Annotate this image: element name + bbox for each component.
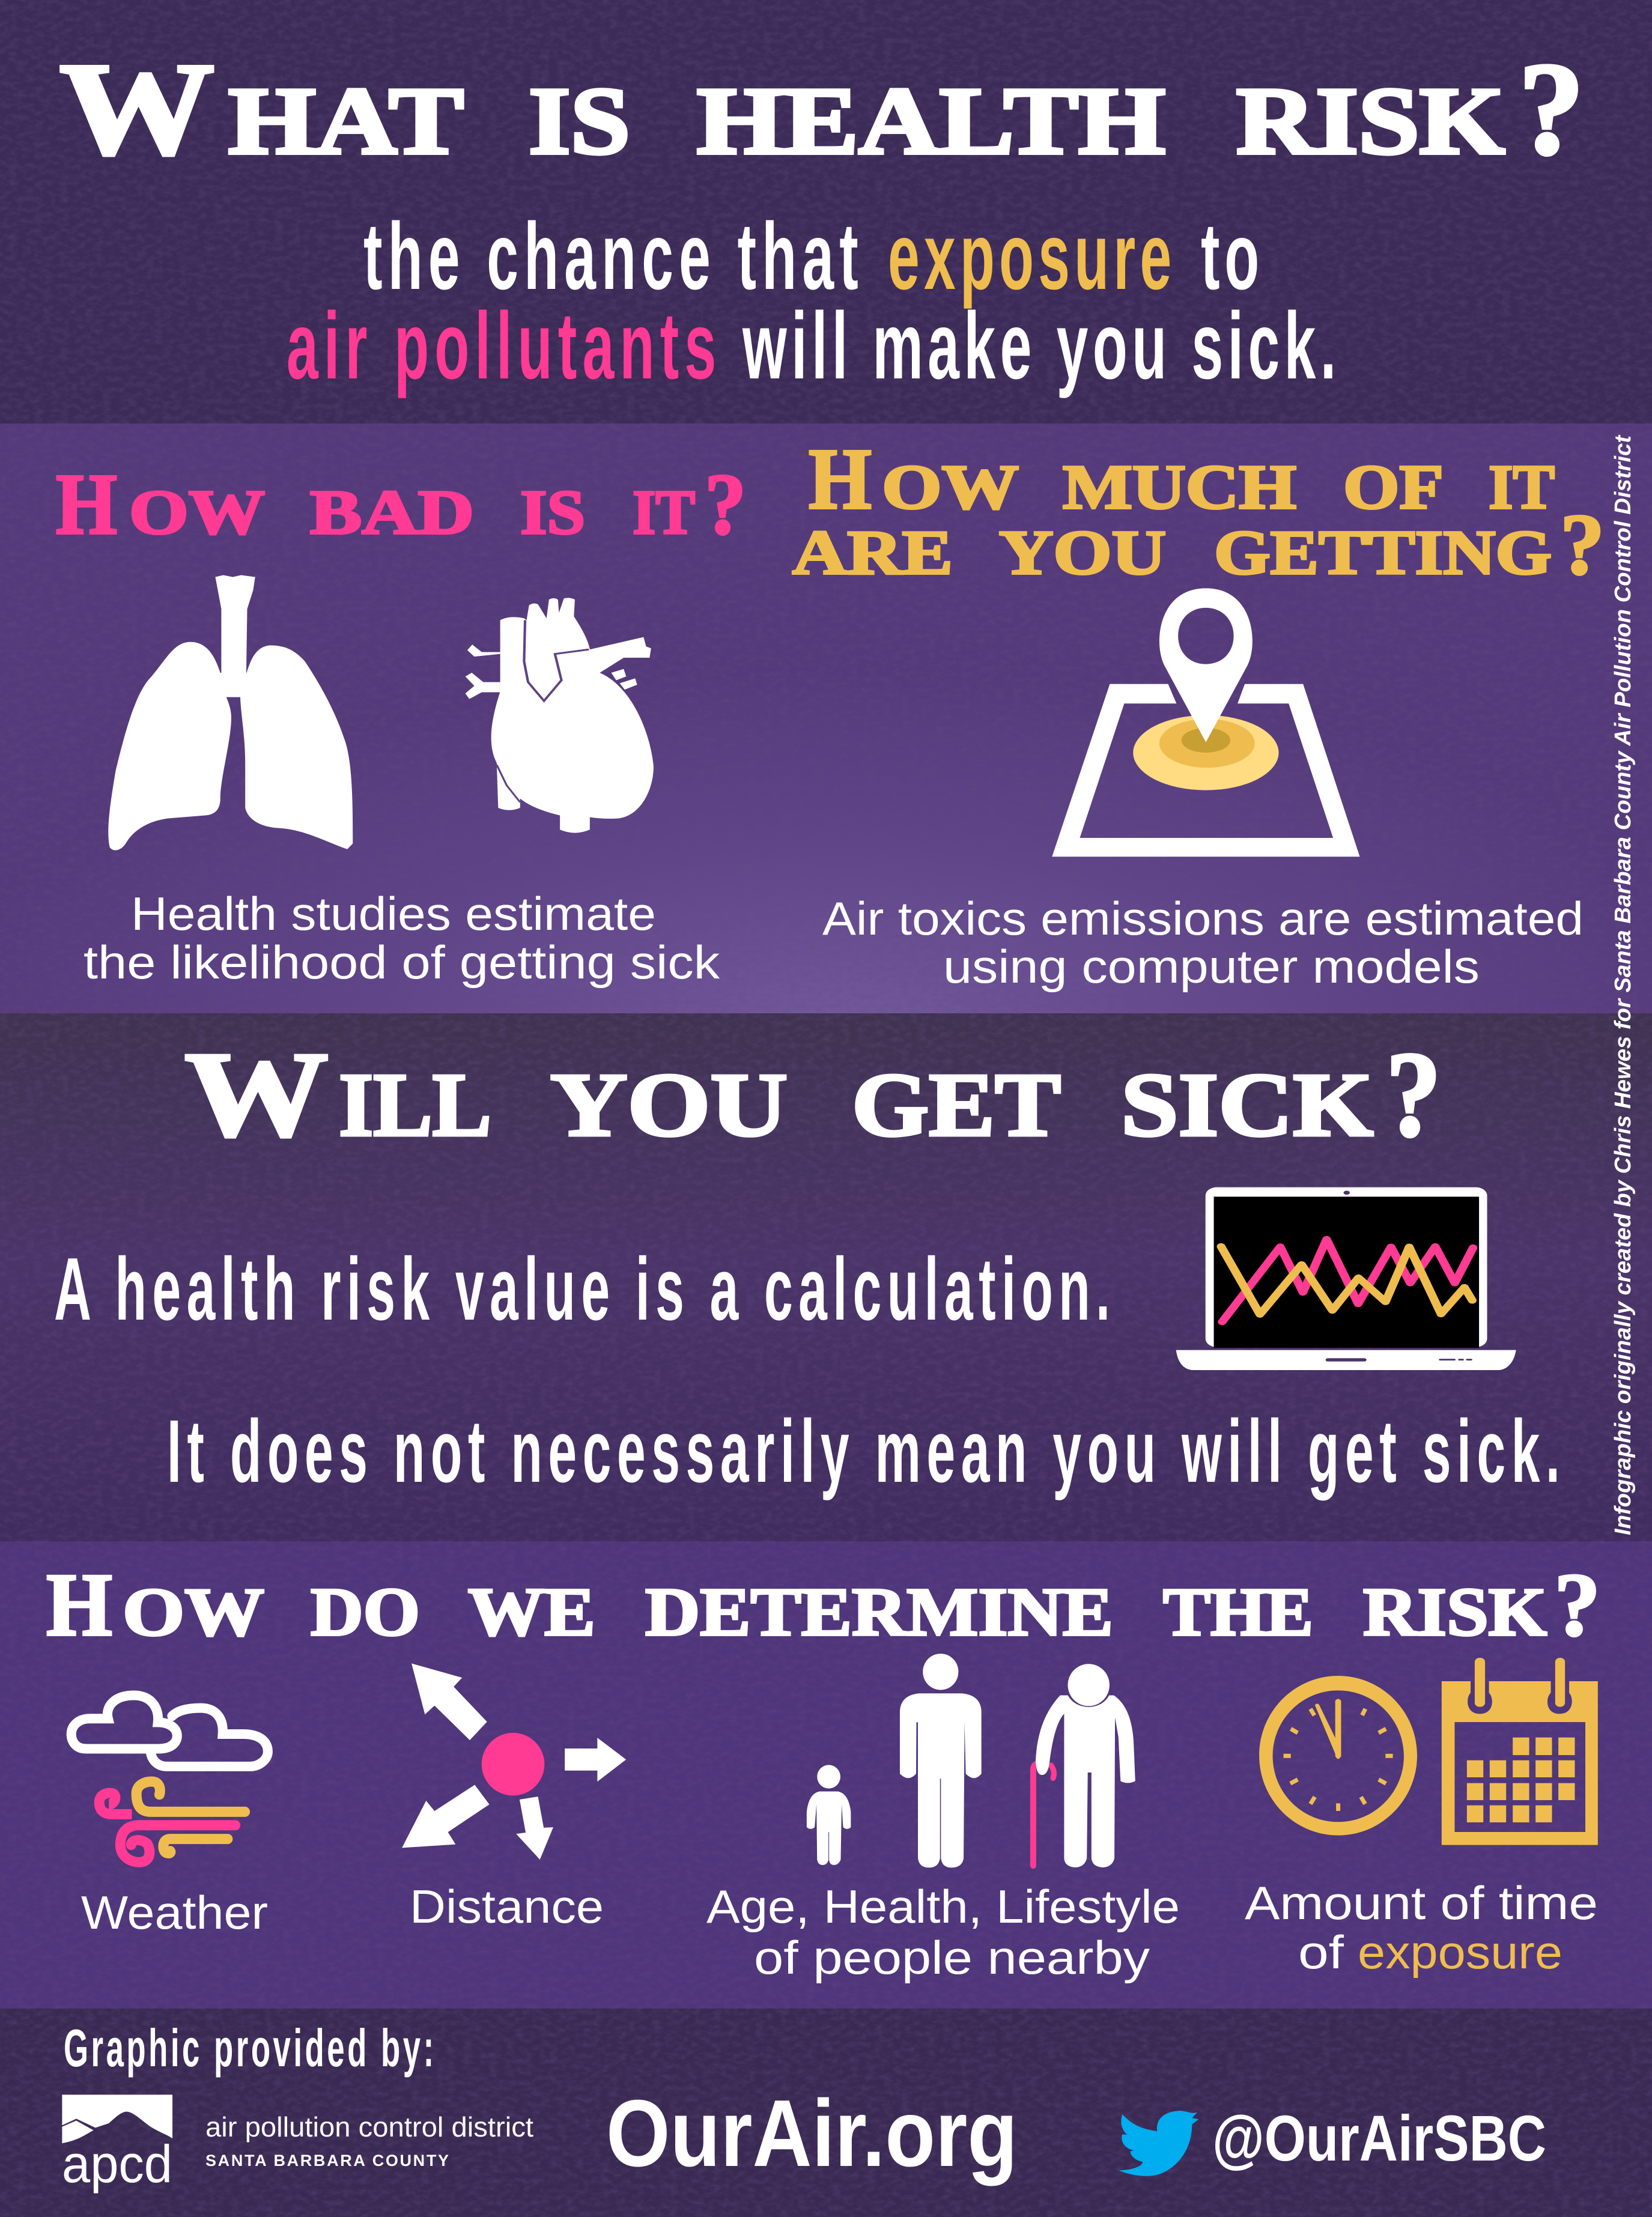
icon: heart — [466, 598, 654, 833]
heading: how much of it are you getting: GETTING — [1214, 517, 1552, 587]
heading: how much of it are you getting: YOU — [999, 517, 1166, 587]
heading: how do we determine the risk: H — [46, 1555, 112, 1655]
icon: twitter bird — [1119, 2111, 1198, 2176]
label: weather: Weather — [81, 1886, 268, 1939]
logo: apcd: SANTA BARBARA COUNTY — [205, 2152, 449, 2170]
credit: vertical text: Infographic originally created by Chris Hewes for Santa Barbara County Air Pollution Control District — [1611, 435, 1636, 1535]
heading: how much of it are you getting: ARE — [792, 517, 953, 587]
heading: how do we determine the risk: ? — [1554, 1555, 1600, 1655]
heading: how much of it are you getting: ? — [1560, 497, 1605, 593]
heading: how bad is it: IT — [633, 477, 695, 547]
subtitle: definition of health risk: to — [1201, 203, 1259, 309]
heading: will you get sick — [184, 1027, 1441, 1162]
heading: how much of it are you getting: OW — [882, 452, 1019, 522]
label: amount of time of exposure: of — [1298, 1926, 1344, 1979]
heading: how much of it are you getting: OF — [1343, 452, 1444, 522]
heading: how much of it are you getting: IT — [1489, 452, 1555, 522]
heading: how bad is it — [56, 456, 746, 553]
caption: air toxics emissions — [822, 892, 1584, 993]
statement: does not mean you get sick: It does not necessarily mean you will get sick. — [167, 1401, 1560, 1501]
heading: will you get sick: ? — [1386, 1027, 1441, 1162]
subtitle: definition of health risk: the chance that — [363, 203, 858, 309]
title: ? — [1519, 35, 1584, 182]
icon: map pin with exposure zone — [1052, 588, 1360, 857]
icon: distance arrows — [402, 1663, 626, 1860]
statement: a health risk value: A health risk value is a calculation. — [54, 1239, 1110, 1339]
title: IS — [529, 67, 630, 174]
logo: apcd — [62, 2094, 533, 2194]
footer: graphic provided by: Graphic provided by: — [64, 2019, 434, 2078]
icon: lungs — [108, 575, 353, 851]
label: distance: Distance — [410, 1880, 604, 1933]
title: HEALTH — [697, 67, 1165, 174]
icon: clouds and wind — [71, 1695, 268, 1862]
heading: how bad is it: ? — [705, 456, 746, 553]
subtitle: definition of health risk — [287, 203, 1336, 399]
heading: will you get sick: GET — [852, 1054, 1061, 1155]
caption: health studies: Health studies estimate — [131, 887, 656, 940]
heading: how do we determine the risk: DETERMINE — [645, 1574, 1113, 1650]
heading: will you get sick: YOU — [550, 1054, 788, 1155]
icon: clock — [1259, 1676, 1417, 1836]
heading: how bad is it: IS — [520, 477, 585, 547]
caption: health studies: the likelihood of getting sick — [84, 936, 720, 989]
heading: how do we determine the risk: DO — [311, 1574, 420, 1650]
title: W — [59, 35, 214, 182]
heading: will you get sick: SICK — [1121, 1054, 1373, 1155]
subtitle: definition of health risk: exposure — [888, 203, 1171, 309]
heading: how much of it are you getting — [792, 431, 1605, 593]
heading: how do we determine the risk: OW — [123, 1574, 264, 1650]
icon: calendar — [1442, 1658, 1598, 1845]
label: age, health, lifestyle: Age, Health, Lifestyle — [706, 1880, 1180, 1933]
label: amount of time of exposure — [1245, 1876, 1598, 1979]
subtitle: definition of health risk: will make you sick. — [742, 293, 1336, 399]
title — [59, 35, 1584, 182]
icon: laptop with line chart — [1176, 1187, 1516, 1370]
heading: how bad is it: H — [56, 456, 117, 553]
heading: will you get sick: W — [184, 1027, 329, 1162]
icon: child, adult, elder with cane — [807, 1654, 1135, 1867]
label: amount of time of exposure: Amount of time — [1245, 1876, 1598, 1929]
heading: how much of it are you getting: H — [809, 431, 872, 527]
heading: how bad is it: BAD — [310, 477, 474, 547]
caption: health studies — [84, 887, 720, 989]
heading: how much of it are you getting: MUCH — [1063, 452, 1296, 522]
heading: will you get sick: ILL — [339, 1054, 491, 1155]
caption: air toxics emissions: using computer models — [943, 940, 1480, 993]
heading: how do we determine the risk: RISK — [1363, 1574, 1547, 1650]
caption: air toxics emissions: Air toxics emissions are estimated — [822, 892, 1584, 945]
heading: how bad is it: OW — [129, 477, 265, 547]
label: age, health, lifestyle — [706, 1880, 1180, 1984]
title: HAT — [228, 67, 464, 174]
title: RISK — [1236, 67, 1505, 174]
logo: apcd: air pollution control district — [205, 2111, 533, 2143]
website: ourair.org: OurAir.org — [606, 2081, 1018, 2186]
heading: how do we determine the risk: THE — [1163, 1574, 1313, 1650]
heading: how do we determine the risk: WE — [468, 1574, 595, 1650]
heading: how do we determine the risk — [46, 1555, 1600, 1655]
logo: apcd: apcd — [62, 2134, 172, 2194]
label: amount of time of exposure: exposure — [1358, 1926, 1562, 1979]
social handle: ourairsbc: @OurAirSBC — [1212, 2102, 1546, 2174]
label: age, health, lifestyle: of people nearby — [754, 1931, 1150, 1984]
subtitle: definition of health risk: air pollutants — [287, 293, 716, 399]
